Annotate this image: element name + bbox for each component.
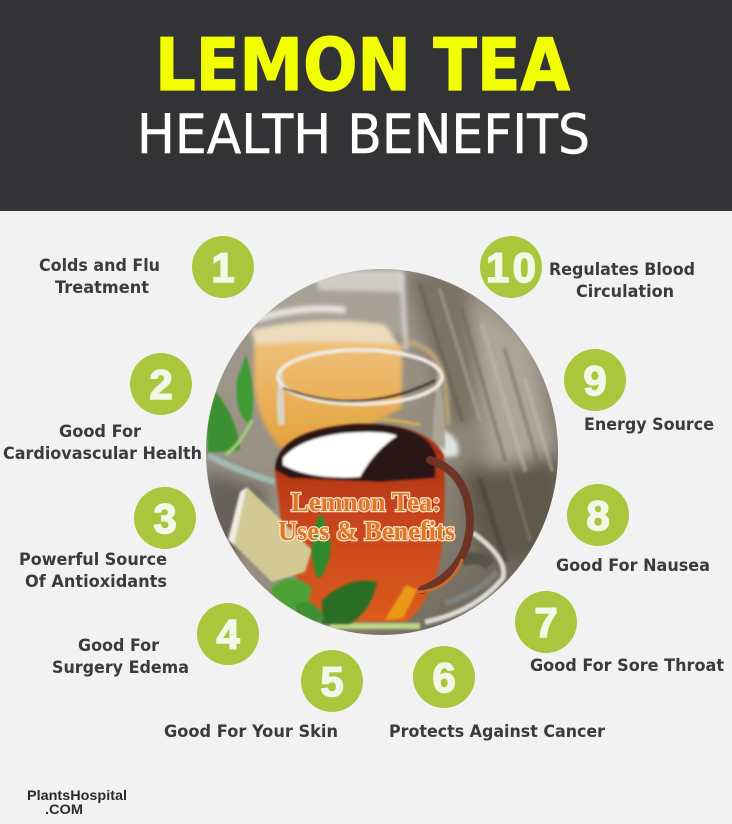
benefit 10: 10: [486, 244, 536, 291]
title: Lemon Tea: LEMON TEA: [155, 23, 570, 107]
source credit: [27, 787, 127, 817]
subtitle: Health Benefits: HEALTH BENEFITS: [137, 103, 590, 166]
benefit 8: [556, 484, 710, 576]
benefit 4: 4: [216, 611, 240, 658]
benefit 5: 5: [320, 658, 344, 705]
benefit 1: [39, 236, 254, 298]
front glass tea: [275, 424, 445, 622]
benefit 10: Circulation: [576, 282, 674, 302]
benefit 9: [564, 349, 714, 435]
left leaves: [206, 355, 275, 482]
benefit 9: Energy Source: [584, 415, 714, 435]
benefit 2: 2: [149, 361, 173, 408]
benefit 1: Colds and Flu: [39, 256, 160, 276]
back glass: [250, 270, 459, 458]
benefit 1: 1: [211, 244, 235, 291]
benefit 4: [52, 603, 259, 678]
benefit 10: Regulates Blood: [549, 260, 695, 280]
benefit 7: [515, 591, 724, 676]
front glass rim: [277, 350, 445, 450]
benefit 8: Good For Nausea: [556, 556, 710, 576]
benefit 7: Good For Sore Throat: [530, 656, 724, 676]
benefit 7: 7: [534, 599, 558, 646]
benefit 9: 9: [583, 357, 607, 404]
source credit: PlantsHospital: [27, 787, 127, 803]
mint leaves: [270, 513, 377, 624]
benefit 1: Treatment: [55, 278, 149, 298]
benefit 5: [164, 650, 363, 742]
benefit 4: Good For: [78, 636, 160, 656]
benefit 3: [19, 487, 196, 592]
benefit 3: Of Antioxidants: [25, 572, 167, 592]
benefit 2: [3, 353, 202, 464]
source credit: .COM: [45, 801, 83, 817]
benefit 3: 3: [153, 495, 177, 542]
header banner: [0, 0, 732, 211]
benefit 2: Cardiovascular Health: [3, 444, 202, 464]
saucer: [330, 533, 504, 626]
benefit 4: Surgery Edema: [52, 658, 189, 678]
benefit 5: Good For Your Skin: [164, 722, 338, 742]
benefit 6: [389, 646, 606, 742]
lemon slice: [228, 487, 312, 582]
benefit 6: Protects Against Cancer: [389, 722, 606, 742]
benefit 3: Powerful Source: [19, 550, 167, 570]
cup handle: [418, 460, 470, 592]
benefit 2: Good For: [59, 422, 142, 442]
photo caption: Lemnon Tea Uses and Benefits: Lemnon Tea:: [291, 487, 441, 517]
photo caption: Lemnon Tea Uses and Benefits: Uses & Benefits: [278, 516, 455, 546]
wood tones: [200, 270, 560, 560]
benefit 6: 6: [432, 654, 456, 701]
benefit 8: 8: [586, 492, 610, 539]
central circular photo of lemon tea: [200, 265, 565, 640]
photo caption: Lemnon Tea Uses and Benefits: [278, 487, 455, 546]
benefit 10: [480, 236, 695, 302]
